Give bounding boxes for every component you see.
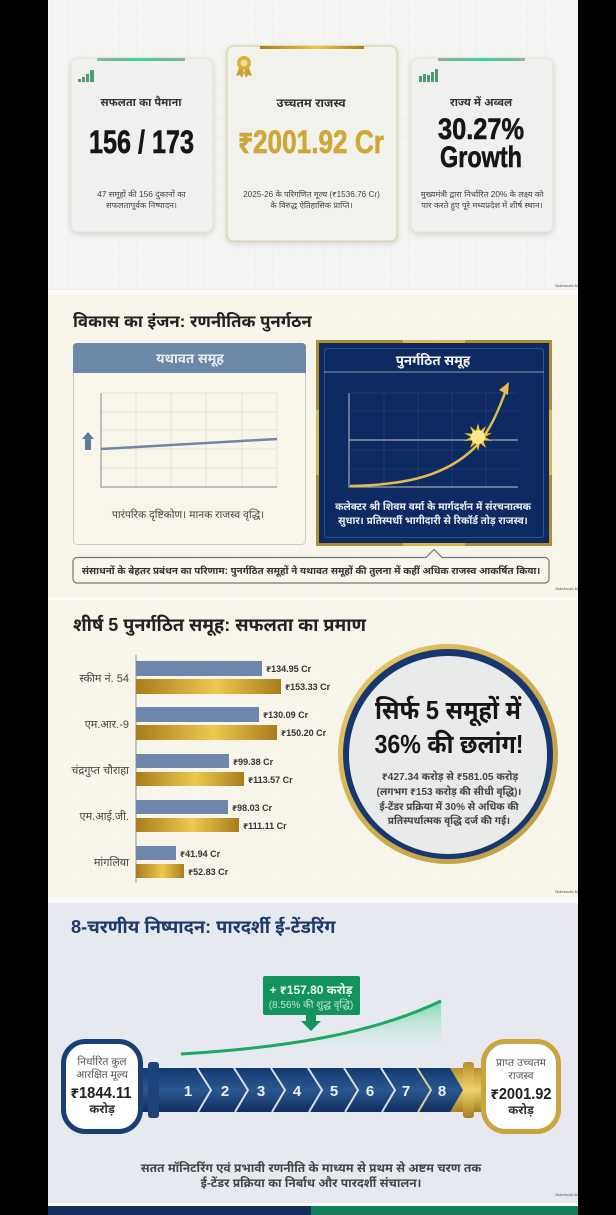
box: revenue achieved: प्राप्त उच्चतम — [496, 1057, 547, 1069]
box: reserve value: करोड़ — [89, 1101, 115, 1116]
card: highest revenue: उच्चतम राजस्व — [276, 96, 346, 110]
heading: top five: शीर्ष 5 पुनर्गठित समूह: सफलता का प्रमाण — [73, 614, 367, 637]
box: revenue achieved: राजस्व — [509, 1070, 535, 1082]
callout: circle: ₹427.34 करोड़ से ₹581.05 करोड़ — [382, 770, 518, 783]
box: reserve value — [64, 1042, 140, 1132]
chart: flat growth — [82, 393, 277, 487]
group: Chandragupt square: ₹99.38 Cr — [233, 757, 274, 767]
card: status quo group: पारंपरिक दृष्टिकोण। मानक राजस्व वृद्धि। — [112, 508, 264, 521]
watermark: NotebookLM — [555, 586, 578, 591]
card: restructured group — [318, 342, 550, 544]
step numbers: 4 — [293, 1083, 302, 1100]
card: first in state: 30.27% — [438, 113, 524, 146]
heading: growth engine: विकास का इंजन: रणनीतिक पुनर्गठन — [73, 311, 312, 332]
group: Manglia — [94, 846, 229, 878]
card: success scale: 156 / 173 — [89, 124, 194, 160]
group: MIG: ₹111.11 Cr — [243, 821, 287, 831]
callout: circle: सिर्फ 5 समूहों में — [375, 695, 522, 727]
step numbers: 2 — [221, 1083, 229, 1100]
group: MIG — [80, 800, 287, 832]
card: first in state: मुख्यमंत्री द्वारा निर्धारित 20% के लक्ष्य को — [421, 189, 544, 200]
icon: green growth bars — [419, 69, 438, 82]
panel: growth engine — [48, 295, 578, 597]
callout: circle: प्रतिस्पर्धात्मक वृद्धि दर्ज की गई। — [388, 815, 510, 827]
callout: circle: ई-टेंडर प्रक्रिया में 30% से अधिक की — [379, 800, 520, 813]
group: MR-9 — [85, 707, 327, 740]
box: revenue achieved — [484, 1042, 558, 1132]
group: MIG: एम.आई.जी. — [80, 810, 129, 823]
watermark: NotebookLM — [555, 1192, 578, 1197]
group: Chandragupt square: चंद्रगुप्त चौराहा — [71, 764, 129, 777]
card: first in state: Growth — [440, 141, 522, 174]
callout: circle: (लगभग ₹153 करोड़ की सीधी वृद्धि)। — [377, 786, 521, 798]
card: success scale: सफलतापूर्वक निष्पादन। — [106, 200, 177, 211]
group: Manglia: ₹52.83 Cr — [188, 867, 229, 877]
card: success scale: सफलता का पैमाना — [100, 96, 182, 109]
step numbers: 6 — [366, 1083, 374, 1100]
group: Chandragupt square — [71, 754, 293, 786]
card: highest revenue: ₹2001.92 Cr — [238, 124, 384, 160]
footer bar — [48, 1206, 578, 1215]
card: success scale: 47 समूहों की 156 दुकानों का — [97, 189, 187, 200]
group: scheme 54: ₹134.95 Cr — [266, 664, 312, 674]
chart: green gain curve — [181, 1001, 441, 1054]
icon: gold medal — [236, 56, 252, 78]
pipeline: eight steps — [138, 1062, 485, 1118]
card: success scale — [71, 58, 213, 232]
callout: result — [73, 550, 549, 583]
callout: circle — [338, 644, 558, 864]
bar chart — [71, 655, 331, 883]
card: restructured group: कलेक्टर श्री शिवम वर्मा के मार्गदर्शन में संरचनात्मक — [335, 500, 532, 513]
group: MR-9: ₹130.09 Cr — [263, 710, 309, 720]
panel: success metrics — [48, 0, 578, 290]
callout: circle: 36% की छलांग! — [374, 729, 524, 759]
group: scheme 54: ₹153.33 Cr — [285, 682, 331, 692]
group: MR-9: एम.आर.-9 — [85, 719, 129, 731]
flange right — [463, 1062, 474, 1118]
card: highest revenue: के विरुद्ध ऐतिहासिक प्राप्ति। — [270, 201, 353, 210]
card: first in state: राज्य में अव्वल — [450, 96, 513, 109]
panel: top five groups — [48, 600, 578, 897]
text: footer note: सतत मॉनिटरिंग एवं प्रभावी रणनीति के माध्यम से प्रथम से अष्टम चरण तक — [141, 1160, 482, 1175]
box: reserve value: ₹1844.11 — [70, 1085, 132, 1102]
heading: eight stage: 8-चरणीय निष्पादन: पारदर्शी ई-टेंडरिंग — [71, 916, 336, 937]
card: restructured group: सुधार। प्रतिस्पर्धी भागीदारी से रिकॉर्ड तोड़ राजस्व। — [338, 514, 528, 527]
box: reserve value: आरक्षित मूल्य — [76, 1068, 129, 1082]
card: status quo group — [73, 343, 306, 544]
group: MR-9: ₹150.20 Cr — [281, 728, 327, 738]
callout: gain — [263, 976, 360, 1031]
step numbers: 1 — [184, 1083, 192, 1100]
card: status quo group: यथावत समूह — [156, 351, 224, 368]
step numbers — [184, 1083, 446, 1100]
group: MIG: ₹98.03 Cr — [232, 803, 273, 813]
icon: spark — [464, 423, 492, 451]
flange left — [148, 1062, 159, 1118]
step numbers: 5 — [330, 1083, 338, 1100]
group: scheme 54 — [79, 661, 331, 694]
callout: gain: (8.56% की शुद्ध वृद्धि) — [269, 999, 353, 1011]
card: first in state — [411, 58, 553, 232]
panel: eight stage execution — [48, 903, 578, 1203]
icon: up arrow — [82, 432, 94, 450]
box: revenue achieved: ₹2001.92 — [490, 1086, 552, 1103]
callout: gain: + ₹157.80 करोड़ — [270, 982, 353, 997]
group: Manglia: ₹41.94 Cr — [180, 849, 221, 859]
chart: exponential growth — [349, 382, 518, 487]
group: scheme 54: स्कीम नं. 54 — [79, 672, 129, 685]
card: first in state: पार करते हुए पूरे मध्यप्रदेश में शीर्ष स्थान। — [421, 200, 543, 211]
watermark: NotebookLM — [555, 283, 578, 288]
card: restructured group: पुनर्गठित समूह — [396, 353, 471, 370]
icon: green bars — [78, 70, 94, 82]
text: footer note — [141, 1160, 482, 1190]
box: revenue achieved: करोड़ — [508, 1102, 534, 1117]
text: footer note: ई-टेंडर प्रक्रिया का निर्बाध और पारदर्शी संचालन। — [201, 1175, 421, 1190]
group: Chandragupt square: ₹113.57 Cr — [248, 775, 293, 785]
group: Manglia: मांगलिया — [94, 856, 129, 869]
box: reserve value: निर्धारित कुल — [77, 1055, 127, 1068]
step numbers: 7 — [402, 1083, 410, 1100]
card: highest revenue: 2025-26 के परिगणित मूल्य (₹1536.76 Cr) — [243, 190, 380, 200]
card: highest revenue — [227, 46, 397, 241]
watermark: NotebookLM — [555, 889, 578, 894]
step numbers: 3 — [257, 1083, 265, 1100]
step numbers: 8 — [438, 1083, 446, 1100]
callout: result: संसाधनों के बेहतर प्रबंधन का परिणाम: पुनर्गठित समूहों ने यथावत समूहों की तुलना में कहीं अधिक राजस्व आकर्षित किया। — [82, 564, 540, 577]
